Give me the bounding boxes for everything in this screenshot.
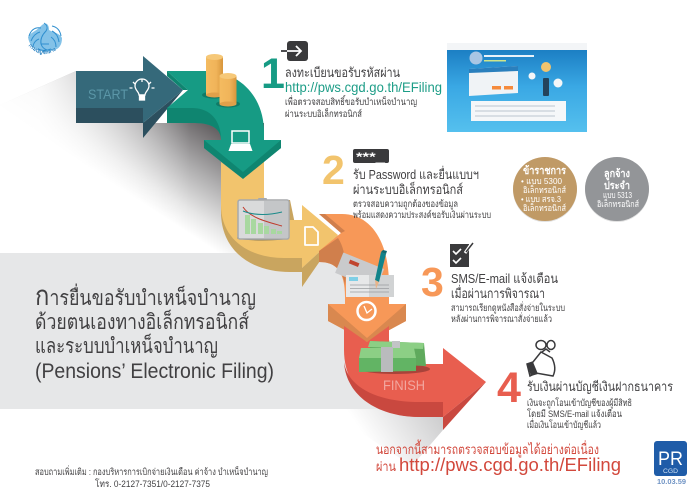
contact footer: โทร. 0-2127-7351/0-2127-7375 [95, 478, 210, 490]
icon: clock [358, 302, 376, 320]
callout: civil servants [513, 157, 577, 222]
callout: civil servants: อิเล็กทรอนิกส์ [523, 184, 567, 195]
icon: laptop [228, 131, 252, 151]
icon: password box: ***_ [356, 150, 385, 164]
icon: hand holding money bag [527, 340, 555, 376]
callout: civil servants: อิเล็กทรอนิกส์ [523, 202, 567, 213]
closing note with link: นอกจากนี้สามารถตรวจสอบข้อมูลได้อย่างต่อเนื่อง [376, 439, 599, 458]
grey title panel background [0, 253, 390, 409]
step 1 description [285, 94, 417, 120]
step 4 description: เมื่อเงินโอนเข้าบัญชีแล้ว [527, 418, 601, 431]
callout: permanent employees [585, 157, 649, 222]
icon: password box [353, 149, 389, 164]
contact footer: สอบถามเพิ่มเติม : กองบริหารการเบิกจ่ายเงินเดือน ค่าจ้าง บำเหน็จบำนาญ [35, 465, 268, 478]
step 2 number: 2 [322, 147, 345, 193]
step 3 number: 3 [421, 259, 444, 305]
start label: START [88, 86, 128, 102]
step 2 description [353, 199, 491, 221]
icon: envelope and form with pen [335, 250, 394, 297]
step 3 heading: SMS/E-mail แจ้งเตือน [451, 271, 558, 286]
step 4 description: เงินจะถูกโอนเข้าบัญชีของผู้มีสิทธิ [527, 397, 632, 409]
contact footer [35, 465, 268, 490]
main title: และระบบบำเหน็จบำนาญ [35, 332, 218, 358]
orange arrow [319, 214, 406, 342]
step 2: ผ่านระบบอิเล็กทรอนิกส์ [353, 180, 463, 197]
callout: civil servants: • แบบ สรจ.3 [521, 194, 561, 204]
step 2 description: พร้อมแสดงความประสงค์ขอรับเงินผ่านระบบ [353, 209, 491, 221]
logo: Comptroller General's Department emblem: กรมบัญชีกลาง [28, 44, 56, 55]
main title [35, 280, 274, 383]
PR CGD badge: PR [658, 449, 683, 470]
main title: (Pensions’ Electronic Filing) [35, 360, 274, 383]
closing note with link [376, 439, 621, 475]
callout: civil servants: ข้าราชการ [523, 164, 566, 177]
icon: coin stacks [202, 54, 240, 108]
callout: permanent employees: ลูกจ้าง [604, 167, 630, 181]
step 4 [497, 340, 673, 431]
step 3 [421, 243, 565, 325]
step 4 description [527, 397, 632, 431]
step 1 heading: ลงทะเบียนขอรับรหัสผ่าน [285, 65, 400, 80]
start arrow [76, 56, 183, 138]
icon: chart board [237, 198, 289, 240]
PR CGD badge: CGD [663, 468, 678, 475]
yellow arrow [221, 162, 338, 287]
icon: money stack [359, 341, 430, 374]
closing note with link: ผ่าน [376, 459, 396, 474]
step 2 [322, 147, 491, 221]
step 3 description: สามารถเรียกดูหนังสือสั่งจ่ายในระบบ [451, 301, 565, 314]
main title: การยื่นขอรับบำเหน็จบำนาญ [35, 280, 256, 311]
step 4 number: 4 [497, 364, 521, 412]
website screenshot [447, 43, 587, 132]
step 2 heading: รับ Password และยื่นแบบฯ [353, 166, 479, 182]
step 4 heading: รับเงินผ่านบัญชีเงินฝากธนาคาร [527, 379, 673, 394]
red finish arrow [344, 326, 486, 430]
step 2 description: ตรวจสอบความถูกต้องของข้อมูล [353, 199, 458, 210]
teal arrow [167, 54, 281, 179]
step 1 [261, 41, 442, 120]
closing note with link: http://pws.cgd.go.th/EFiling [399, 455, 621, 475]
callout: permanent employees: ประจำ [604, 180, 630, 192]
icon: light bulb [130, 79, 154, 100]
step 1 description: ผ่านระบบอิเล็กทรอนิกส์ [285, 107, 362, 120]
long shadow under finish arrow [325, 409, 443, 466]
step 1 description: เพื่อตรวจสอบสิทธิ์ขอรับบำเหน็จบำนาญ [285, 94, 417, 108]
step 1 number: 1 [261, 50, 285, 98]
icon: login arrow box [281, 41, 308, 61]
callout: civil servants: • แบบ 5300 [521, 176, 562, 186]
PR CGD badge: 10.03.59 [657, 479, 686, 486]
icon: checklist [450, 243, 473, 267]
long shadow behind start and teal arrows [0, 71, 264, 253]
step 3: เมื่อผ่านการพิจารณา [451, 285, 545, 301]
finish label: FINISH [383, 377, 425, 393]
main title: ด้วยตนเองทางอิเล็กทรอนิกส์ [35, 308, 249, 334]
step 1 link: http://pws.cgd.go.th/EFiling [285, 79, 442, 95]
step 3 description [451, 301, 565, 325]
logo: Comptroller General's Department emblem [28, 22, 62, 55]
step 4 description: โดยมี SMS/E-mail แจ้งเตือน [527, 408, 622, 420]
icon: document [305, 227, 318, 245]
PR CGD badge [654, 441, 687, 486]
step 3 description: หลังผ่านการพิจารณาสั่งจ่ายแล้ว [451, 312, 552, 325]
callout: permanent employees: แบบ 5313 [603, 190, 632, 200]
callout: permanent employees: อิเล็กทรอนิกส์ [597, 198, 640, 209]
